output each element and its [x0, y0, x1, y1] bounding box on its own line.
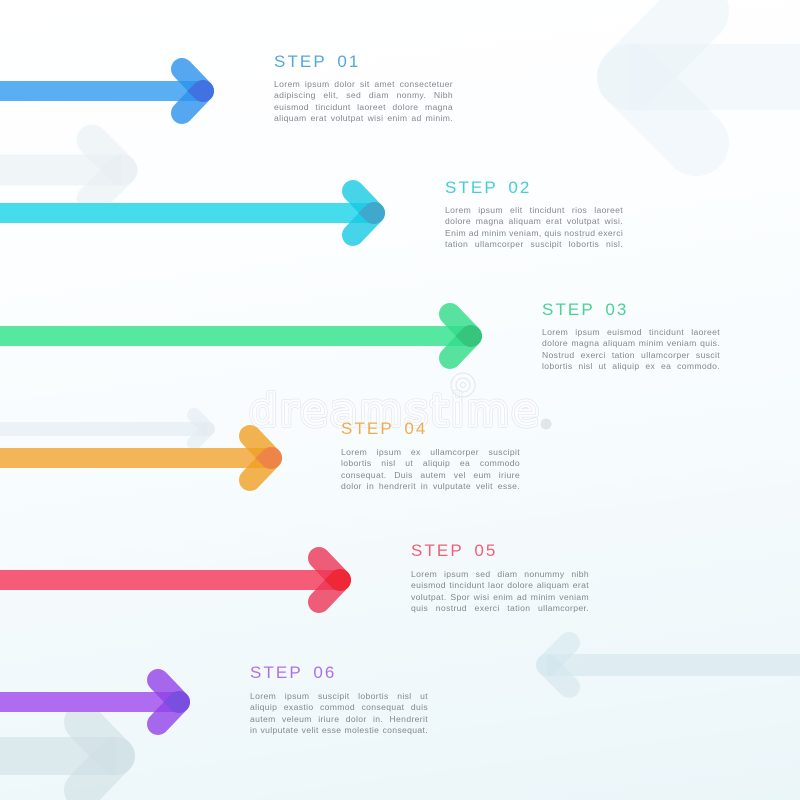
body: step 02: Lorem ipsum elit tincidunt rios laoreet — [445, 205, 623, 215]
step 02 text — [445, 178, 623, 249]
body: step 03: Lorem ipsum euismod tincidunt laoreet — [542, 327, 720, 337]
body: step 05: euismod tincidunt laor dolore aliquam erat — [411, 580, 589, 590]
body: step 04: lobortis nisl ut aliquip ea commodo — [341, 458, 520, 468]
body: step 03: Nostrud exerci tation ullamcorper suscit — [542, 350, 720, 360]
body: step 03: lobortis nisl ut aliquip ex ea commodo. — [542, 361, 720, 371]
step 01 text — [274, 52, 453, 123]
body: step 06: in vulputate velit esse molestie consequat. — [250, 725, 428, 735]
body: step 06: autem veleum iriure dolor in. Hendrerit — [250, 714, 428, 724]
arrow: step 02 cyan — [0, 191, 385, 235]
ghost arrow: upper left — [0, 140, 122, 200]
step 04 text — [341, 419, 520, 491]
body: step 01: Lorem ipsum dolor sit amet consectetuer — [274, 79, 453, 89]
body: step 01: adipiscing elit, sed diam nonmy. Nibh — [274, 90, 453, 100]
heading: step 04: STEP 04 — [341, 419, 427, 438]
step 03 text — [542, 300, 720, 371]
body: step 05: quis nostrud exerci tation ullamcorper. — [411, 603, 589, 613]
ghost arrow: top right — [630, 11, 800, 143]
body: step 03 — [542, 327, 720, 371]
arrow: step 04 orange — [0, 436, 282, 480]
heading: step 01: STEP 01 — [274, 52, 360, 71]
body: step 02: Enim ad minim veniam, quis nostrud exerci — [445, 228, 623, 238]
heading: step 03: STEP 03 — [542, 300, 628, 319]
watermark: dreamstime — [250, 386, 538, 435]
heading: step 06: STEP 06 — [250, 663, 336, 682]
arrow: step 05 red — [0, 558, 351, 602]
body: step 04: dolor in hendrerit in vulputate velit esse. — [341, 481, 520, 491]
ghost arrow: lower right — [547, 643, 800, 687]
body: step 04: consequat. Duis autem vel eum iriure — [341, 470, 520, 480]
step 05 text — [411, 541, 589, 613]
arrow: step 03 green — [0, 314, 482, 358]
watermark: dreamstime — [250, 386, 538, 435]
heading: step 05: STEP 05 — [411, 541, 497, 560]
body: step 05 — [411, 569, 589, 613]
body: step 04 — [341, 447, 520, 491]
body: step 02 — [445, 205, 623, 249]
body: step 02: dolore magna aliquam erat volutpat wisi. — [445, 216, 623, 226]
body: step 02: tation ullamcorper suscipit lobortis nisl. — [445, 239, 623, 249]
body: step 06: Lorem ipsum suscipit lobortis nisl ut — [250, 691, 428, 701]
watermark: dreamstime — [250, 386, 538, 435]
body: step 06: aliquip exastio commod consequat duis — [250, 702, 428, 712]
body: step 05: Lorem ipsum sed diam nonummy nibh — [411, 569, 589, 579]
body: step 01: aliquam erat volutpat wisi enim ad minim. — [274, 113, 453, 123]
body: step 01: euismod tincidunt laoreet dolore magna — [274, 102, 453, 112]
heading: step 02: STEP 02 — [445, 178, 531, 197]
ghost arrow: middle left — [0, 415, 208, 443]
step 06 text — [250, 663, 428, 735]
body: step 05: volutpat. Spor wisi enim ad minim veniam — [411, 592, 589, 602]
ghost arrow: bottom left — [0, 722, 116, 790]
body: step 06 — [250, 691, 428, 735]
arrow: step 01 blue — [0, 69, 214, 113]
arrow: step 06 purple — [0, 680, 190, 724]
body: step 04: Lorem ipsum ex ullamcorper suscipit — [341, 447, 520, 457]
body: step 03: dolore magna aliquam minim veniam quis. — [542, 338, 720, 348]
body: step 01 — [274, 79, 453, 123]
